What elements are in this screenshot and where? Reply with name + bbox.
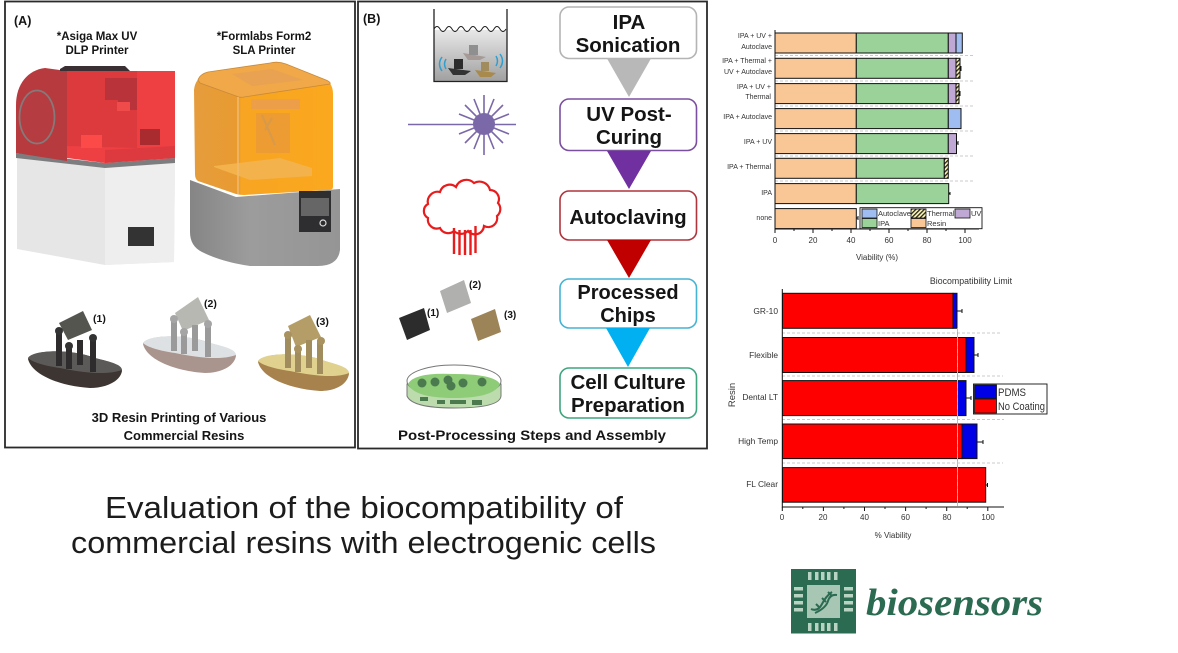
icon: processed chips: (2) (469, 280, 481, 291)
icon: printed part 3 tan (258, 315, 349, 391)
category labels: IPA + Thermal (727, 164, 771, 171)
panel B: post-processing steps (358, 2, 707, 448)
legend: No Coating (998, 401, 1045, 413)
bar: High Temp (782, 424, 983, 459)
arrow: grey (607, 58, 651, 97)
x axis title: Viability (%) (856, 253, 898, 262)
step box: IPA Sonication: IPA (613, 11, 646, 34)
icon: processed chips (399, 280, 516, 341)
legend (860, 208, 982, 229)
category labels: IPA + UV + (737, 84, 771, 91)
category labels: UV + Autoclave (724, 69, 772, 76)
legend: Thermal (927, 209, 955, 218)
row: IPA + UV (775, 134, 958, 154)
title: commercial resins with electrogenic cells (71, 526, 656, 560)
category labels (722, 33, 772, 222)
x tick labels: 60 (901, 513, 910, 522)
x tick labels: 80 (943, 513, 952, 522)
heading: Formlabs printer: SLA Printer (233, 45, 296, 57)
panel label B: (B) (363, 12, 380, 26)
row separators (775, 56, 975, 181)
x tick labels: 20 (809, 236, 818, 245)
heading: Formlabs printer: *Formlabs Form2 (217, 31, 311, 43)
bar: GR-10 (782, 293, 962, 328)
title (71, 491, 656, 560)
x tick labels (780, 513, 995, 522)
icon: sonication tank (434, 9, 507, 82)
step box: Cell Culture Preparation: Preparation (571, 394, 685, 417)
icon: processed chips: (1) (427, 308, 439, 319)
step box: IPA Sonication: Sonication (576, 34, 680, 57)
icon: printed part 2 grey (143, 297, 236, 373)
legend (974, 384, 1047, 414)
step box: Processed Chips: Processed (577, 282, 679, 304)
category labels: Autoclave (741, 44, 772, 51)
step box: UV Post-Curing: Curing (596, 126, 662, 149)
bar: Flexible (782, 338, 978, 372)
axes (775, 30, 979, 233)
icon: printed part 1 dark: (1) (93, 313, 106, 325)
x tick labels: 80 (923, 236, 932, 245)
panel A: 3D resin printing (5, 2, 355, 448)
category labels: IPA + UV + (738, 33, 772, 40)
x tick labels: 40 (847, 236, 856, 245)
row: IPA + Thermal (775, 158, 948, 178)
step box: Processed Chips (560, 279, 696, 328)
icon: steam cloud (424, 180, 500, 255)
icon: UV laser burst (408, 95, 516, 155)
category labels: GR-10 (753, 306, 778, 316)
arrow: purple (607, 151, 651, 189)
legend: IPA (878, 219, 890, 228)
icon: printed part 2 grey: (2) (204, 298, 217, 310)
row: IPA + UV + Thermal (775, 84, 960, 104)
panel label A: (A) (14, 14, 31, 28)
category labels: Flexible (749, 350, 778, 360)
category labels: none (756, 215, 772, 222)
row: IPA + UV + Autoclave (775, 33, 962, 53)
logo: biosensors journal (791, 569, 1043, 634)
heading: Asiga printer: *Asiga Max UV (57, 31, 138, 43)
x tick labels (773, 236, 972, 245)
y axis title: Resin (727, 383, 738, 407)
title: Evaluation of the biocompatibility of (105, 491, 624, 525)
x tick labels: 0 (773, 236, 778, 245)
icon: red DLP printer (16, 66, 175, 265)
wordmark: biosensors (866, 582, 1043, 624)
bar: Dental LT (782, 381, 971, 416)
category labels: IPA + UV (744, 139, 772, 146)
x tick labels: 40 (860, 513, 869, 522)
caption: panel A: 3D Resin Printing of Various (92, 410, 266, 425)
row separators (782, 333, 1004, 463)
icon: printed part 1 dark (28, 311, 122, 388)
step box: IPA Sonication (560, 7, 696, 58)
arrow: blue (606, 328, 650, 367)
category labels: Dental LT (742, 392, 778, 402)
step box: Autoclaving: Autoclaving (569, 206, 687, 229)
legend: PDMS (998, 387, 1026, 399)
legend: UV (971, 209, 981, 218)
x tick labels: 0 (780, 513, 785, 522)
icon: petri dish (407, 365, 501, 408)
x tick labels: 100 (981, 513, 995, 522)
row: IPA + Thermal + UV + Autoclave (775, 58, 962, 78)
step box: Autoclaving (560, 191, 696, 240)
x axis title: % Viability (875, 531, 911, 540)
chart: viability by post-processing step (722, 30, 982, 262)
step box: Processed Chips: Chips (600, 305, 656, 327)
chart: viability by resin (727, 276, 1047, 540)
step box: UV Post-Curing: UV Post- (586, 103, 672, 126)
category labels (738, 306, 778, 489)
category labels: IPA (761, 190, 772, 197)
step box: Cell Culture Preparation: Cell Culture (570, 371, 686, 394)
arrow: red (607, 240, 651, 278)
category labels: IPA + Thermal + (722, 58, 772, 65)
category labels: Thermal (745, 94, 771, 101)
row: IPA (775, 184, 950, 204)
category labels: High Temp (738, 436, 778, 446)
category labels: IPA + Autoclave (723, 114, 772, 121)
caption: panel B: Post-Processing Steps and Assembly (398, 428, 667, 443)
legend: Autoclave (878, 209, 911, 218)
icon: processed chips: (3) (504, 310, 516, 321)
step box: Cell Culture Preparation (560, 368, 696, 418)
biocompatibility limit line (956, 328, 958, 506)
x tick labels: 60 (885, 236, 894, 245)
caption: panel A: Commercial Resins (124, 428, 244, 443)
step box: UV Post-Curing (560, 99, 696, 150)
category labels: FL Clear (746, 479, 778, 489)
heading: biocompatibility limit: Biocompatibility Limit (930, 276, 1013, 286)
row: IPA + Autoclave (775, 109, 961, 129)
icon: chip with DNA (791, 569, 856, 634)
heading: Asiga printer: DLP Printer (65, 45, 129, 57)
axes (782, 289, 1004, 511)
row: none (775, 209, 858, 229)
icon: orange SLA printer (190, 62, 340, 266)
bar: FL Clear (782, 468, 988, 502)
x tick labels: 20 (819, 513, 828, 522)
icon: printed part 3 tan: (3) (316, 316, 329, 328)
x tick labels: 100 (958, 236, 972, 245)
legend: Resin (927, 219, 946, 228)
